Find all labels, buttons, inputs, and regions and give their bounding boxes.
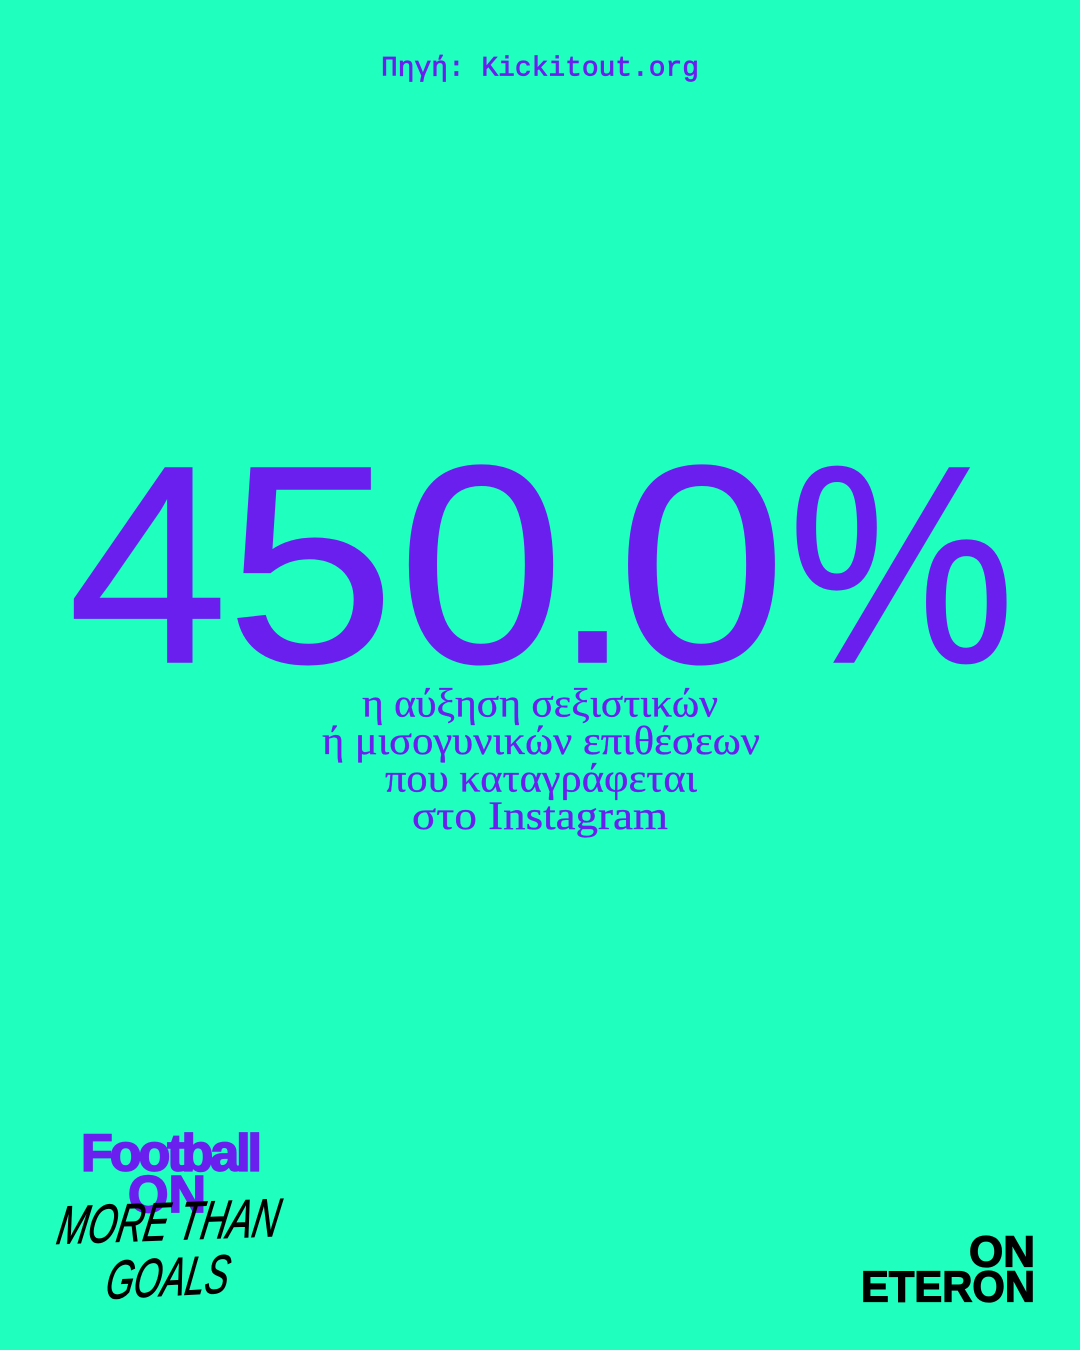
logo: Football ON More Than Goals	[53, 1124, 286, 1311]
headline number: .	[553, 407, 632, 722]
headline number: 0	[617, 407, 786, 722]
headline number	[68, 407, 1015, 722]
headline number: %	[788, 407, 1015, 722]
source line: Πηγή: Kickitout.org	[381, 54, 699, 84]
headline number: 0	[398, 407, 564, 722]
description text	[322, 680, 760, 838]
logo: ON ETERON	[861, 1228, 1035, 1312]
description text: ή μισογυνικών επιθέσεων	[322, 718, 760, 763]
logo wordmark: ON: ON	[969, 1228, 1035, 1276]
logo wordmark: Football: Football	[81, 1124, 262, 1182]
logo wordmark: ON: ON	[128, 1166, 206, 1224]
headline number: 5	[226, 407, 395, 722]
logo wordmark: ETERON: ETERON	[861, 1262, 1035, 1312]
logo script: MORE THAN: MORE THAN	[53, 1187, 286, 1256]
headline number: 4	[68, 407, 228, 722]
description text: η αύξηση σεξιστικών	[362, 680, 718, 726]
description text: που καταγράφεται	[385, 756, 697, 800]
description text: στο Instagram	[412, 793, 668, 838]
logo script: GOALS: GOALS	[102, 1244, 235, 1311]
